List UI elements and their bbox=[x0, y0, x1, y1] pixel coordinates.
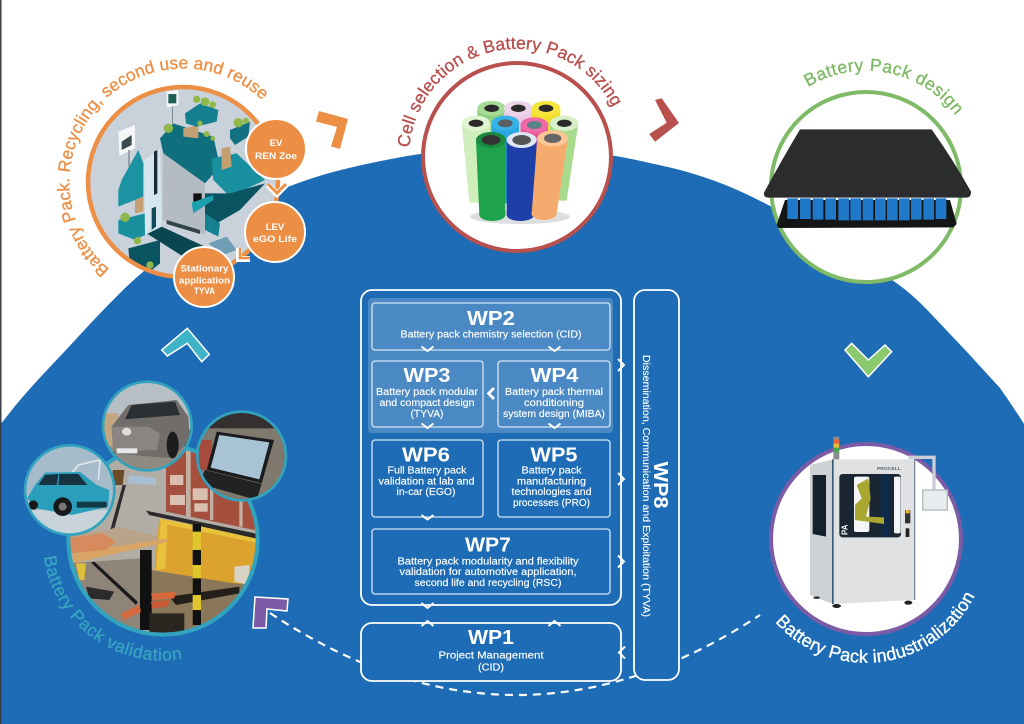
box: WP1: WP1 bbox=[468, 626, 514, 649]
box: WP7: Battery pack modularity and flexibility bbox=[398, 556, 578, 567]
badge: LEV eGO Life bbox=[245, 202, 305, 262]
heading: industrialization: Battery Pack industrialization bbox=[776, 592, 975, 663]
box: WP6: in-car (EGO) bbox=[396, 487, 456, 498]
box: WP3: and compact design bbox=[380, 398, 474, 409]
box: WP7: validation for automotive application, bbox=[400, 567, 576, 578]
highlight panel behind WP2 to WP4 bbox=[368, 298, 613, 433]
heading: pack design: Battery Pack design bbox=[803, 58, 962, 115]
arrow: teal chevron bbox=[162, 328, 209, 362]
box: WP4: conditioning bbox=[524, 398, 584, 409]
ring with white fill bbox=[423, 63, 611, 251]
ring bbox=[88, 87, 278, 277]
badge: EV REN Zoe: REN Zoe bbox=[255, 151, 297, 162]
panel: battery pack industrialization bbox=[769, 436, 975, 663]
box: WP1: (CID) bbox=[478, 663, 504, 674]
panel: battery pack validation bbox=[24, 380, 288, 661]
work package diagram bbox=[361, 290, 679, 681]
box: WP5: Battery pack bbox=[522, 465, 583, 476]
box: WP5 bbox=[498, 440, 610, 517]
badge: stationary application TYVA: application bbox=[179, 275, 230, 286]
box: WP2: WP2 bbox=[467, 307, 515, 330]
box: WP4: WP4 bbox=[530, 364, 579, 387]
box: WP3: Battery pack modular bbox=[376, 387, 479, 398]
box: WP3 bbox=[372, 361, 483, 427]
arrow core: EV to LEV bbox=[268, 184, 286, 193]
box: WP4: Battery pack thermal bbox=[505, 387, 603, 398]
ring with white fill bbox=[771, 444, 961, 634]
illustration: battery pack bbox=[764, 129, 971, 228]
panel: recycling, second use and reuse bbox=[56, 59, 306, 308]
arrow: red chevron bbox=[649, 98, 679, 142]
background: blue arc bbox=[0, 148, 1024, 724]
badge: LEV eGO Life: LEV bbox=[266, 222, 285, 233]
box: WP7: second life and recycling (RSC) bbox=[414, 578, 562, 589]
badge: stationary application TYVA: TYVA bbox=[194, 286, 215, 297]
illustration: PROCELL machine: PA bbox=[840, 524, 849, 535]
box: WP3: WP3 bbox=[404, 364, 450, 387]
inset photos bbox=[24, 380, 287, 537]
box: WP5: WP5 bbox=[530, 444, 578, 466]
box: WP5: manufacturing bbox=[517, 476, 586, 487]
left edge line bbox=[0, 0, 2, 724]
illustration: PROCELL machine bbox=[810, 437, 947, 608]
arrow core: LEV to stationary bbox=[240, 248, 250, 258]
badge: stationary application TYVA bbox=[174, 247, 234, 307]
dashed cycle arrow bbox=[270, 613, 760, 695]
box: WP7 bbox=[372, 529, 610, 594]
box: WP7: WP7 bbox=[465, 534, 511, 556]
box: WP3: (TYVA) bbox=[410, 409, 444, 420]
arrow: EV to LEV bbox=[268, 185, 286, 194]
heading: validation: Battery Pack validation bbox=[44, 556, 182, 661]
box: WP1 bbox=[361, 623, 621, 681]
illustration: battery cells bbox=[462, 101, 579, 224]
arrow: green chevron bbox=[845, 343, 892, 377]
box: WP5: processes (PRO) bbox=[513, 498, 590, 509]
box: WP4: system design (MIBA) bbox=[503, 409, 605, 420]
box: WP6: validation at lab and bbox=[378, 476, 474, 487]
box: WP8: Dissemination, Communication and Exploitation (TYVA) bbox=[640, 355, 651, 617]
badge: EV REN Zoe: EV bbox=[270, 138, 283, 149]
badge: LEV eGO Life: eGO Life bbox=[253, 234, 297, 245]
main photo: test bench bbox=[66, 443, 263, 637]
box: WP1: Project Management bbox=[438, 650, 544, 661]
box: WP8 bbox=[634, 290, 679, 680]
box: WP2: Battery pack chemistry selection (CID) bbox=[400, 330, 582, 340]
box: WP2 bbox=[372, 303, 610, 350]
inset photo: laptop bbox=[197, 412, 287, 500]
ring with white fill bbox=[771, 92, 961, 282]
badge: EV REN Zoe bbox=[246, 119, 306, 179]
arrow: orange chevron bbox=[316, 111, 348, 149]
WP group frame bbox=[361, 290, 621, 605]
box: WP8: WP8 bbox=[649, 462, 672, 508]
heading: recycling: Battery Pack. Recycling, second use and reuse bbox=[56, 59, 267, 278]
box: WP4 bbox=[498, 361, 610, 427]
illustration: PROCELL machine: PROCELL bbox=[877, 466, 901, 472]
flow arrows between work packages bbox=[422, 346, 625, 658]
box: WP6: WP6 bbox=[402, 444, 450, 466]
inset photo: silver car bbox=[102, 380, 193, 473]
panel: battery pack design bbox=[764, 58, 972, 284]
box: WP6 bbox=[372, 440, 483, 517]
arrow: purple chevron bbox=[253, 597, 288, 628]
panel: cell selection and battery pack sizing bbox=[398, 37, 621, 253]
illustration: smart city building bbox=[90, 89, 276, 274]
badge: stationary application TYVA: Stationary bbox=[180, 264, 229, 275]
heading: cell selection: Cell selection & Battery Pack sizing bbox=[398, 37, 621, 146]
box: WP6: Full Battery pack bbox=[388, 465, 468, 476]
inset photo: blue car bbox=[24, 445, 116, 537]
arrow: LEV to stationary bbox=[239, 248, 250, 259]
box: WP5: technologies and bbox=[512, 487, 592, 498]
